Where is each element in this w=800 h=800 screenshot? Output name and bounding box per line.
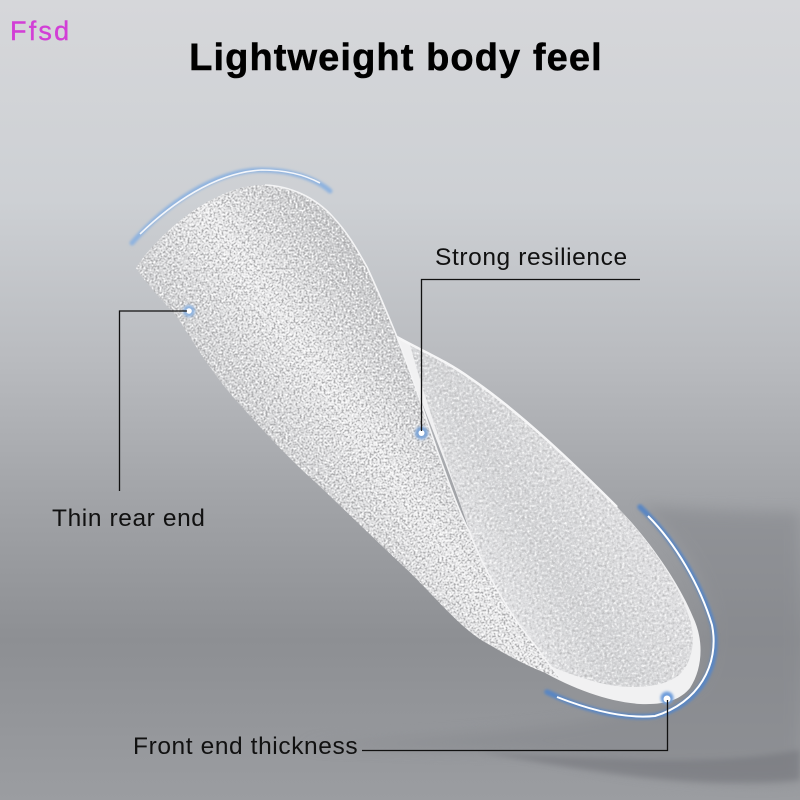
toe section inner surface bbox=[397, 337, 701, 704]
blue arc: toe bbox=[547, 507, 715, 717]
insole bbox=[136, 185, 701, 704]
callout: thin rear end bbox=[52, 305, 206, 532]
brand mark: Ffsd bbox=[10, 16, 71, 46]
heel and midfoot twisted strip bbox=[136, 185, 560, 678]
callout: thin rear end: Thin rear end bbox=[52, 505, 206, 532]
callout: strong resilience bbox=[415, 244, 640, 440]
callout: front end thickness: Front end thickness bbox=[133, 733, 358, 760]
blue arc: heel top bbox=[132, 170, 330, 243]
callout: strong resilience: Strong resilience bbox=[435, 244, 628, 271]
title: Lightweight body feel bbox=[189, 37, 603, 79]
callout: front end thickness bbox=[133, 692, 674, 760]
